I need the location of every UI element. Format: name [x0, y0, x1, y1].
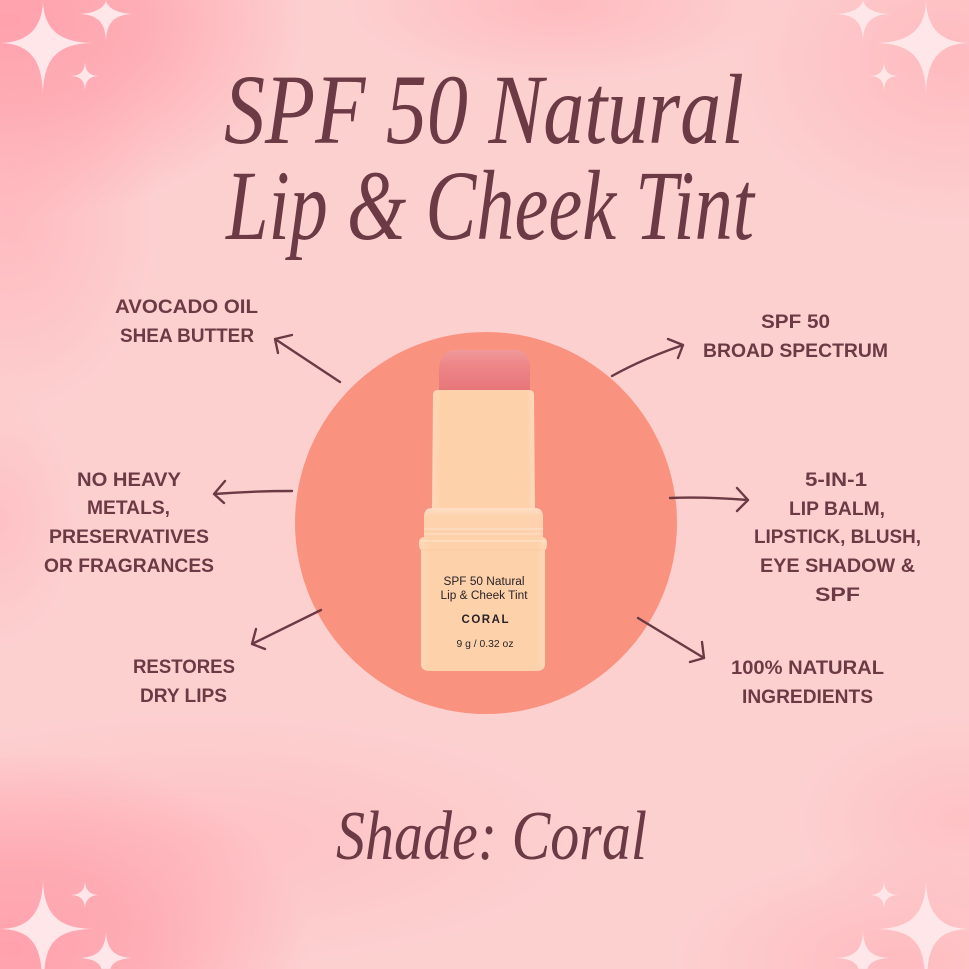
- callout: no heavy metals: METALS,: [87, 497, 170, 519]
- callout: no heavy metals: NO HEAVY: [77, 469, 181, 491]
- upper tube: [432, 390, 535, 512]
- label: product type: Lip & Cheek Tint: [440, 590, 528, 602]
- centre circle: [295, 332, 677, 714]
- arrow: to restores dry lips: [252, 610, 321, 649]
- callout: spf 50 broad spectrum: [703, 311, 888, 362]
- base rim line: [421, 549, 545, 551]
- product: lip and cheek tint stick: [419, 350, 547, 671]
- callout: no heavy metals: OR FRAGRANCES: [44, 555, 214, 577]
- base: [419, 537, 547, 671]
- callout: natural ingredients: INGREDIENTS: [742, 686, 873, 708]
- callout: 5-in-1: LIPSTICK, BLUSH,: [754, 526, 921, 548]
- title: SPF 50 Natural: [224, 54, 744, 165]
- collar: [424, 508, 543, 540]
- callout: spf 50 broad spectrum: SPF 50: [761, 311, 830, 333]
- title: [224, 54, 756, 261]
- sparkles: top right: [835, 0, 969, 95]
- callout: 5-in-1: [754, 469, 921, 606]
- callout: natural ingredients: [731, 657, 884, 708]
- callout: avocado oil shea butter: AVOCADO OIL: [115, 296, 258, 318]
- label: weight: 9 g / 0.32 oz: [456, 639, 514, 650]
- callout: spf 50 broad spectrum: BROAD SPECTRUM: [703, 340, 888, 362]
- sparkles: top left: [0, 0, 134, 95]
- arrow: to natural ingredients: [638, 618, 704, 662]
- flange highlight: [421, 540, 545, 542]
- sparkles: bottom left: [0, 879, 134, 969]
- shade heading: Shade: Coral: [336, 798, 647, 875]
- collar ribs: [424, 529, 543, 534]
- arrow: to spf 50: [612, 339, 683, 376]
- callout: no heavy metals: PRESERVATIVES: [49, 526, 209, 548]
- callout: 5-in-1: EYE SHADOW &: [760, 555, 915, 577]
- callout: restores dry lips: DRY LIPS: [140, 685, 227, 707]
- callout: no heavy metals: [44, 469, 214, 577]
- arrow: to no heavy metals: [214, 481, 292, 503]
- callout: restores dry lips: [133, 656, 235, 707]
- callout: restores dry lips: RESTORES: [133, 656, 235, 678]
- callout: avocado oil shea butter: [115, 296, 258, 347]
- sparkles: bottom right: [835, 879, 969, 969]
- title: Lip & Cheek Tint: [224, 150, 756, 261]
- arrow: to 5-in-1: [670, 488, 748, 511]
- callout: avocado oil shea butter: SHEA BUTTER: [120, 325, 254, 347]
- label: product name: SPF 50 Natural: [444, 576, 524, 588]
- tinted balm: [439, 350, 530, 392]
- callout: 5-in-1: LIP BALM,: [789, 498, 885, 520]
- callout: 5-in-1: SPF: [815, 584, 860, 606]
- label: shade: CORAL: [462, 614, 508, 626]
- arrow: to avocado oil: [275, 335, 340, 382]
- callout: natural ingredients: 100% NATURAL: [731, 657, 884, 679]
- callout: 5-in-1: 5-IN-1: [805, 469, 867, 491]
